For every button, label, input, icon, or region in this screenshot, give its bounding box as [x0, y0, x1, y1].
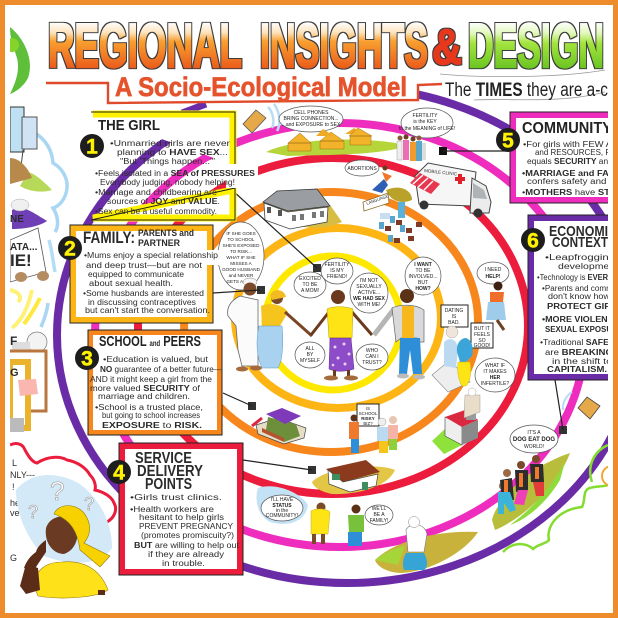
heading: school and peers: SCHOOL and PEERS	[99, 333, 201, 350]
number badge 4	[107, 460, 131, 484]
thought: not sexually active: I'M NOT	[360, 278, 378, 284]
text: the girl bullets: •Unmarried girls are never	[110, 139, 230, 148]
thought: we'll be a family: WE'LL	[372, 506, 387, 512]
scene: protester with sign: BIZ?	[363, 421, 373, 426]
title: REGIONAL	[48, 12, 242, 81]
figure: father in white robe	[228, 278, 262, 372]
thought: not sexually active: WE HAD SEX	[353, 296, 385, 302]
thought: cell phones: ...and EXPOSURE to SEX	[282, 122, 341, 128]
thought: I want to be involved: TO BE	[416, 268, 431, 274]
cloud fragment text: L	[12, 458, 17, 468]
thought: if she goes to school: IF SHE GOES	[226, 231, 256, 236]
number badge 6	[521, 228, 545, 252]
number badge 2	[58, 236, 82, 260]
sign: but it feels so good	[471, 323, 493, 349]
title: &	[432, 19, 462, 75]
thought: excited to be a mom: TO BE	[303, 282, 318, 288]
scene: need help girl: I NEED	[485, 267, 502, 273]
cloud fragment text: !	[12, 482, 15, 492]
scene: need help girl: HELP!	[486, 274, 501, 280]
thought: dog eat dog world: DOG EAT DOG	[513, 437, 555, 443]
heading: service delivery points: SERVICE	[135, 450, 192, 467]
figure: woman in yellow dress	[311, 502, 330, 544]
subtitle: A Socio-Ecological Model	[115, 72, 407, 102]
thought: cell phones	[279, 106, 343, 132]
scene: outdoor classroom: LANGUAGE	[366, 193, 389, 206]
panel 2: family	[70, 225, 221, 323]
scene: mobile clinic truck: MOBILE CLINIC	[424, 168, 458, 177]
concentric socio-ecological rings	[57, 87, 618, 583]
text: service bullets: •Health workers are	[130, 505, 215, 514]
text: economic bullets	[537, 253, 618, 374]
thinking woman with yellow headscarf	[16, 475, 112, 598]
heading: economic context	[549, 223, 617, 251]
scene: pharmacy stall with workers	[432, 388, 480, 454]
thought: status in the community: COMMUNITY!	[266, 513, 298, 519]
left panel: data poster with wizard hat: ATA...	[10, 242, 38, 253]
thought: status in the community: in the	[276, 508, 288, 514]
leader lines	[213, 151, 563, 470]
thought: cell phones: BRING CONNECTION...	[283, 116, 339, 122]
scene: grandmother and girl on mat	[432, 326, 473, 392]
sign: dating is bad: DATING	[445, 308, 463, 314]
thought: fertility is the key: is the KEY	[413, 119, 437, 125]
thought: if she goes to school: TO RISK...	[230, 249, 252, 254]
scene: kneeling woman in field	[375, 516, 478, 573]
text: the girl bullets: •Feels isolated in a SEA of PRESSURES	[95, 169, 256, 178]
text: school bullets: NO guarantee of a better future—	[100, 365, 222, 374]
sign: but it feels so good: SO	[478, 338, 486, 344]
sign: dating is bad: BAD.	[448, 320, 460, 326]
text: family bullets: and deep trust—but are not	[86, 261, 203, 270]
scene: phone with signal lower right	[563, 392, 600, 419]
text: economic bullets: don't know how to	[548, 292, 618, 301]
thought: dog eat dog world: IT'S A	[527, 430, 541, 436]
text: community bullets: confers safety and status	[527, 177, 618, 186]
figure: central girl	[311, 290, 372, 380]
thought: not sexually active: SEXUALLY	[356, 284, 382, 290]
text: family bullets: about sexual health.	[89, 279, 173, 288]
scene: house with red roof	[312, 460, 395, 494]
text: family bullets: in discussing contraceptives	[88, 298, 196, 307]
thought: status in the community: I'LL HAVE	[271, 497, 294, 503]
heading: family: PARENTS and	[138, 228, 194, 238]
text: service bullets: •Girls trust clinics.	[130, 493, 222, 502]
thought: excited to be a mom: A MOM!	[301, 288, 319, 294]
text: the girl bullets: •Marriage and childbearing are	[95, 188, 218, 197]
text: the girl bullets: •Sex can be a useful commodity.	[95, 207, 217, 216]
panel 4: service delivery points	[119, 443, 243, 575]
thought: we'll be a family: FAMILY!	[370, 518, 388, 524]
left panel: data poster with wizard hat	[10, 199, 49, 282]
scene: running girl with abortions bubble	[345, 160, 412, 202]
thought: if she goes to school: and NEVER	[229, 273, 254, 278]
text: family bullets	[83, 251, 219, 315]
text: school bullets: but going to school increases	[102, 411, 200, 420]
thought: dog eat dog world: WORLD!	[524, 444, 544, 450]
logo: green figure	[10, 27, 30, 94]
cloud fragment text: he	[10, 498, 20, 508]
scene: outdoor classroom	[363, 193, 422, 243]
sign: dating is bad	[441, 305, 468, 327]
text: economic bullets: •MORE VIOLENCE	[542, 315, 618, 324]
text: school bullets: •School is a trusted place,	[95, 403, 203, 412]
left panel: data poster with wizard hat: IE!	[10, 251, 32, 270]
text: school bullets: more valued SECURITY of	[90, 384, 201, 393]
text: school bullets: EXPOSURE to RISK.	[102, 421, 202, 430]
text: the girl bullets: "But 'Things happen...'"	[120, 157, 215, 166]
scene: group of villagers	[397, 134, 426, 161]
number badge 4: 4	[113, 462, 125, 484]
panel 5: community	[510, 112, 618, 203]
thought: all by myself	[295, 342, 325, 368]
figure: partner in grey jacket	[374, 289, 425, 380]
left panel: light bulb and picture frame	[10, 332, 47, 432]
cloud fragment text: NLY---	[10, 470, 35, 480]
thought: fertility is the key: to the MEANING of LIFE!	[399, 126, 455, 132]
figure: man in green shirt	[348, 504, 364, 546]
thought: what if it makes her infertile: INFERTILE?	[481, 381, 509, 387]
scene: protester with sign: IS	[366, 406, 370, 411]
heading: family: FAMILY:	[83, 228, 135, 247]
scene: need help girl	[477, 262, 509, 330]
left panel: signs and blue cloud	[10, 107, 67, 327]
thought: cell phones: CELL PHONES	[294, 110, 329, 116]
text: the girl bullets	[95, 139, 256, 216]
text: family bullets: •Some husbands are interested	[83, 289, 204, 298]
sign: but it feels so good: FEELS	[474, 332, 491, 338]
thought: dog eat dog world	[510, 425, 558, 453]
text: service bullets: (promotes promiscuity?)	[141, 531, 234, 540]
thought: if she goes to school: TO SCHOOL	[228, 237, 255, 242]
text: school bullets: •Education is valued, but	[103, 355, 209, 364]
text: economic bullets: are BREAKING	[545, 348, 613, 357]
thought: fertility is my friend: FERTILITY	[325, 262, 350, 268]
scene: graduation cap and books	[252, 408, 306, 444]
heading: service delivery points	[135, 450, 204, 493]
thought: what if it makes her infertile: HER	[490, 375, 501, 381]
text: community bullets	[522, 140, 618, 197]
text: service bullets: BUT are willing to help out	[134, 541, 240, 550]
text: economic bullets: CAPITALISM.	[547, 365, 607, 374]
thought: all by myself: BY	[307, 352, 314, 358]
thought: who can I trust: CAN I	[365, 354, 379, 360]
thinking woman with yellow headscarf: ?	[28, 502, 38, 522]
number badge 5	[496, 128, 520, 152]
heading: service delivery points: DELIVERY	[137, 463, 204, 480]
text: service bullets	[130, 493, 240, 568]
left panel: light bulb and picture frame: F	[10, 334, 17, 348]
text: family bullets: but can't start the conversation.	[85, 306, 210, 315]
marker square: community	[439, 147, 447, 155]
text: service bullets: if they are already	[148, 550, 224, 559]
thought: who can I trust	[356, 344, 388, 370]
purple ring stub above panel 1	[182, 104, 206, 113]
scene: cell phone with signal	[243, 104, 279, 133]
thought: fertility is my friend	[321, 258, 353, 284]
figure: mother in yellow and blue	[257, 290, 312, 368]
thinking woman with yellow headscarf: ?	[84, 494, 94, 514]
text: school bullets: marriage and children.	[98, 392, 190, 401]
scene: mobile clinic truck	[410, 163, 491, 218]
thought: if she goes to school	[218, 222, 264, 290]
thought: status in the community	[256, 486, 308, 524]
swoosh under tagline	[440, 70, 605, 100]
text: family bullets: •Mums enjoy a special relationship	[84, 251, 219, 260]
scene: gang of men on the path	[492, 453, 570, 530]
sign: but it feels so good: GOOD!	[474, 343, 490, 349]
panel 6: economic context	[528, 215, 618, 380]
thought: excited to be a mom: EXCITED	[299, 276, 321, 282]
number badge 1	[80, 134, 104, 158]
thought: fertility is the key: FERTILITY	[413, 113, 438, 119]
thought: fertility is my friend: IS MY	[330, 268, 344, 274]
thought: excited to be a mom	[294, 272, 326, 298]
scene: protester with sign: RISKY	[361, 416, 375, 421]
panel 1: the girl	[91, 112, 258, 220]
thought: not sexually active: ACTIVE...	[358, 290, 380, 296]
lower left red thought cloud	[10, 444, 116, 522]
text: the girl bullets: sources of JOY and VALUE .	[107, 197, 220, 206]
thought: if she goes to school: GOOD HUSBAND	[222, 267, 261, 272]
number badge 3	[75, 346, 99, 370]
thought: we'll be a family: BE A	[373, 512, 385, 518]
thought: not sexually active: WITH ME!	[357, 302, 381, 308]
scene: grey community building	[263, 189, 342, 229]
scene: village huts	[266, 128, 400, 156]
thought: what if it makes her infertile: WHAT IF	[485, 363, 505, 369]
heading bar under title	[46, 83, 442, 103]
thought: I want to be involved: HOW?	[415, 286, 431, 292]
text: school bullets: AND it might keep a girl from the	[90, 375, 213, 384]
thought: if she goes to school: SHE'S EXPOSED	[223, 243, 260, 248]
title backing that hides the top of the outer ring	[214, 83, 417, 110]
thought: I want to be involved: BUT	[418, 280, 428, 286]
cloud fragment text: G	[10, 553, 17, 563]
text: community bullets: •MARRIAGE and FAMILY	[522, 169, 618, 178]
left panel: light bulb and picture frame: G	[10, 367, 19, 379]
thought: status in the community: STATUS	[272, 503, 292, 509]
sign: dating is bad: IS	[452, 314, 457, 320]
thought: all by myself: MYSELF	[300, 358, 320, 364]
left panel: data poster with wizard hat: NE	[10, 214, 24, 225]
thought: not sexually active	[350, 273, 388, 313]
thought: what if it makes her infertile	[475, 358, 515, 392]
thought: if she goes to school: GETS A JOB?	[226, 279, 256, 284]
scene: protester with sign: SCHOOL	[359, 411, 378, 416]
thought: who can I trust: WHO	[366, 348, 378, 354]
lower right green cloud outline	[503, 445, 608, 552]
title	[48, 12, 604, 81]
thought: we'll be a family	[365, 505, 393, 525]
number badge 2: 2	[64, 238, 76, 260]
text: service bullets: in trouble.	[162, 559, 205, 568]
text: family bullets: equipped to communicate	[88, 270, 185, 279]
thinking woman with yellow headscarf: ?	[50, 476, 64, 506]
thought: I want to be involved	[405, 257, 441, 295]
scene: running girl with abortions bubble: ABORTIONS	[347, 166, 377, 172]
title: INSIGHTS	[260, 12, 428, 81]
thought: if she goes to school: MISSES A	[230, 261, 253, 266]
number badge 6: 6	[527, 230, 539, 252]
thought: I want to be involved: INVOLVED...	[408, 274, 438, 280]
thought: if she goes to school: WHAT IF SHE	[226, 255, 256, 260]
thought: fertility is the key	[399, 108, 455, 138]
heading: the girl: THE GIRL	[98, 117, 160, 134]
scene: protester with sign	[349, 404, 398, 453]
thought: I want to be involved: I WANT	[414, 262, 432, 268]
text: the girl bullets: planning to HAVE SEX ...	[117, 148, 228, 157]
sign: but it feels so good: BUT IT	[474, 326, 490, 332]
thought: what if it makes her infertile: IT MAKES	[483, 369, 507, 375]
text: service bullets: PREVENT PREGNANCY	[139, 522, 234, 531]
text: economic bullets: in the shift to	[552, 357, 613, 366]
left panel: yellow burst	[10, 290, 40, 328]
number badge 3: 3	[81, 348, 93, 370]
thought: all by myself: ALL	[306, 346, 315, 352]
heading: community: COMMUNITY	[522, 120, 612, 137]
text: school bullets	[90, 355, 222, 430]
thought: who can I trust: TRUST?	[362, 360, 382, 366]
thought: fertility is my friend: FRIEND!	[327, 274, 347, 280]
text: the girl bullets: Everybody judging, nobody helping!	[100, 178, 235, 187]
orange seal at right edge	[601, 466, 608, 486]
marker squares for boxes	[248, 264, 567, 474]
number badge 1: 1	[86, 136, 98, 158]
text: economic bullets: PROTECT GIRLS	[547, 302, 618, 311]
heading: family	[83, 228, 194, 248]
text: service bullets: hesitant to help girls	[139, 513, 224, 522]
text: economic bullets: development	[558, 262, 618, 271]
panel 3: school and peers	[88, 330, 222, 435]
heading: family: PARTNER	[138, 238, 180, 248]
text: economic bullets: •Leapfrogging	[545, 253, 615, 262]
heading: service delivery points: POINTS	[145, 476, 192, 493]
cloud fragment text	[10, 458, 35, 563]
cloud fragment text: ve	[10, 508, 20, 518]
number badge 5: 5	[502, 130, 514, 152]
text: economic bullets: •Traditional SAFETY	[540, 338, 618, 347]
